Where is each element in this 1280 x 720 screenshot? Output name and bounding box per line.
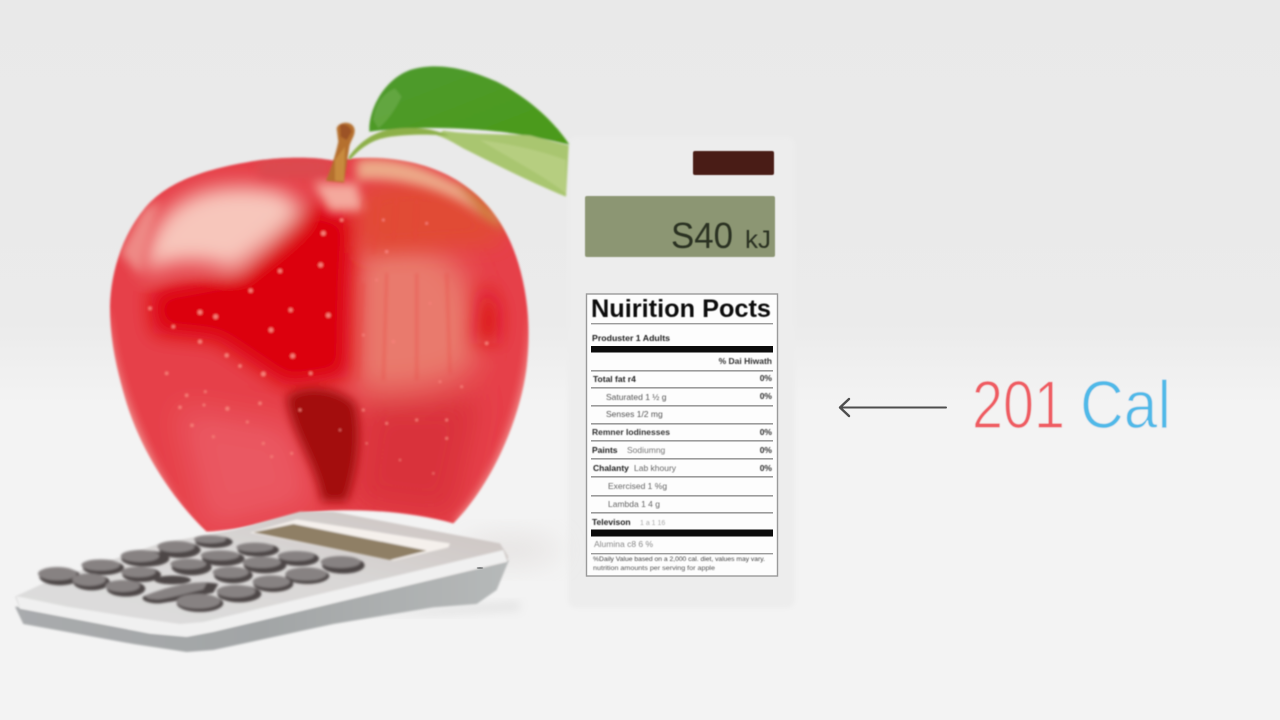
icon: calculator [15,512,520,652]
daily value header: % Dai Hiwath [719,356,772,366]
calculator shadow [367,602,520,615]
calculator keys [38,535,365,612]
nutrient rows: Senses 1/2 mg [606,409,663,419]
label title: Nuirition Pocts [591,295,771,323]
icon: leaf [348,66,569,197]
nutrient rows: 1 a 1 16 [640,520,665,527]
nutrient rows: Exercised 1 %g [608,481,667,491]
calorie value: Cal [1080,367,1171,443]
nutrient rows: Saturated 1 ½ g [606,392,667,402]
panel: nutrition facts label: nutrition amounts per serving for apple [593,565,716,572]
nutrient rows: Televison [592,517,631,527]
nutrient rows: Sodiumng [627,445,666,455]
calculator front highlight [16,550,507,637]
icon: apple [100,140,540,540]
calorie value: 201 [972,367,1065,443]
calculator top face [15,512,508,637]
calorie display [585,196,775,257]
rules [591,323,773,554]
nutrient rows: 0% [760,463,772,473]
calculator screen [250,519,450,561]
nutrient rows: Chalanty [593,463,629,473]
icon: device speaker bar [693,151,774,175]
floor shadow [460,536,560,564]
nutrient rows: Total fat r4 [593,374,636,384]
icon: apple stem [326,123,355,183]
calculator body side [15,560,509,652]
nutrient rows: Alumina c8 6 % [594,539,653,549]
apple skin speckles [148,218,488,474]
serving line: Produster 1 Adults [592,333,670,343]
panel: nutrition facts label [586,294,778,576]
footnote: %Daily Value based on a 2,000 cal. diet, values may vary. [593,556,765,563]
nutrient rows: 0% [760,391,772,401]
nutrient rows [592,373,772,549]
nutrient rows: Lab khoury [634,463,677,473]
display reading: S40 [671,215,733,256]
panel: translucent phone card [568,137,795,608]
nutrient rows: 0% [760,427,772,437]
nutrient rows: Paints [592,445,618,455]
nutrient rows: 0% [760,373,772,383]
infographic scene [14,64,1167,653]
nutrient rows: Remner Iodinesses [592,427,670,437]
nutrient rows: Lambda 1 4 g [608,499,660,509]
calculator side port [477,567,483,569]
nutrient rows: 0% [760,445,772,455]
display reading: kJ [745,226,771,254]
calorie value [972,367,1171,443]
apple vertical streaks [357,197,450,380]
arrow [840,399,946,416]
